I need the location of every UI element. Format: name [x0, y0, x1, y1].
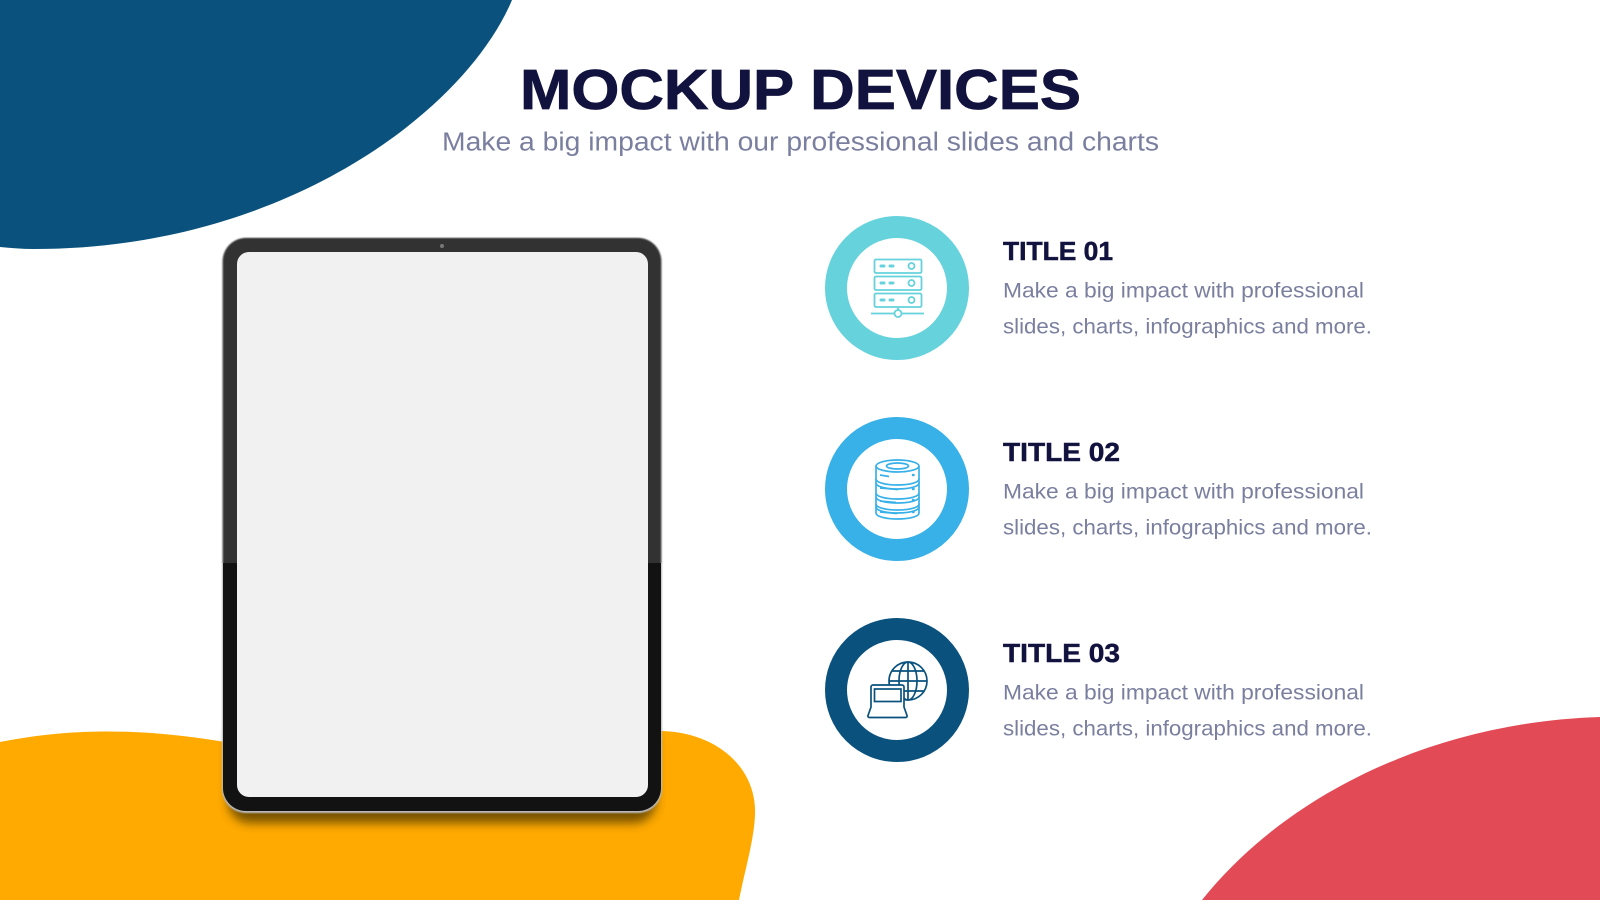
blob: red bottom right [1202, 717, 1600, 900]
item 01 [836, 227, 1372, 349]
description 02: slides, charts, infographics and more. [1003, 516, 1372, 540]
icon: server rack [871, 260, 924, 317]
tablet body upper [222, 236, 662, 563]
description 01: Make a big impact with professional [1003, 280, 1364, 302]
description 01: slides, charts, infographics and more. [1003, 316, 1372, 338]
heading 01: TITLE 01 [1003, 236, 1113, 266]
ring: sky blue [836, 428, 958, 550]
description 03: slides, charts, infographics and more. [1003, 718, 1372, 740]
description 03: Make a big impact with professional [1003, 682, 1364, 704]
blob: yellow bottom left [0, 731, 755, 900]
tablet screen [237, 252, 648, 797]
ring: navy [836, 629, 958, 751]
description 02: Make a big impact with professional [1003, 480, 1364, 504]
icon: laptop and globe [868, 662, 927, 718]
item 03 [836, 629, 1372, 751]
ring: turquoise [836, 227, 958, 349]
tablet camera [440, 244, 444, 248]
title: MOCKUP DEVICES [520, 58, 1081, 121]
icon: database [876, 460, 919, 519]
description 02 [1003, 480, 1372, 540]
tablet mockup [222, 238, 662, 823]
heading 02: TITLE 02 [1003, 437, 1120, 467]
heading 03: TITLE 03 [1003, 638, 1120, 668]
tablet shadow [228, 720, 656, 823]
description 01 [1003, 280, 1372, 338]
tablet edge highlight [222, 238, 662, 813]
blob: navy top left [0, 0, 512, 249]
description 03 [1003, 682, 1372, 740]
subtitle: Make a big impact with our professional slides and charts [442, 128, 1159, 156]
item 02 [836, 428, 1372, 550]
tablet body lower [223, 563, 661, 811]
